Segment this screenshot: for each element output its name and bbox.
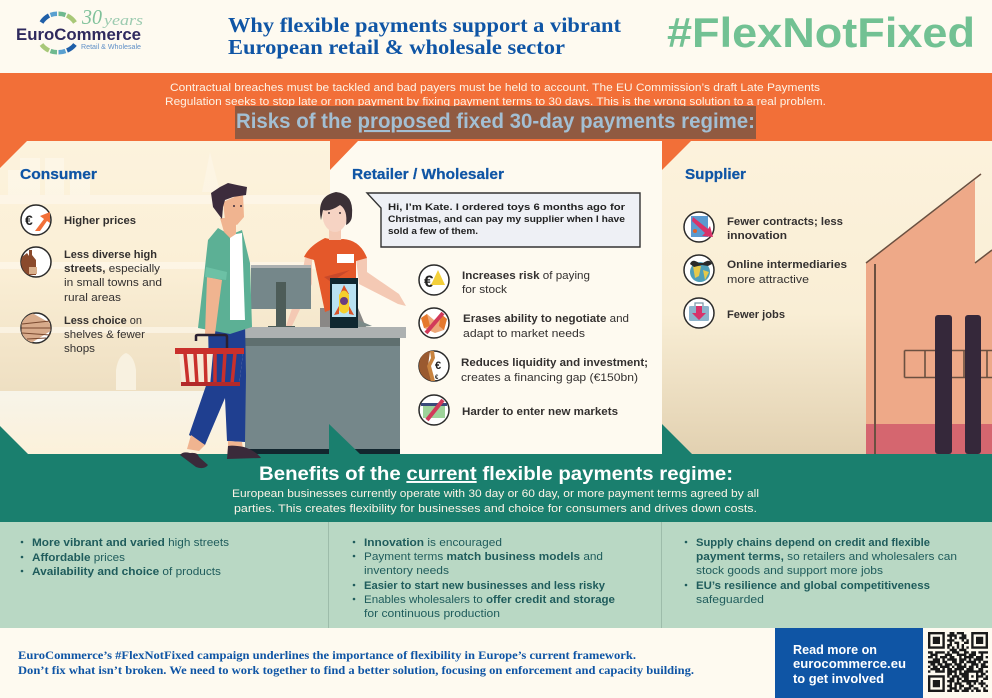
icon: higher prices: €	[25, 212, 33, 228]
speech bubble: Hi, I’m Kate. I ordered toys 6 months ago for	[388, 202, 625, 213]
text: risk: Increases risk of paying	[462, 270, 590, 282]
list: supplier benefits: stock goods and support more jobs	[696, 565, 884, 577]
icon: less diverse high streets	[21, 247, 51, 277]
panel: retailer background	[330, 141, 662, 454]
logo: EuroCommerce 30 years: EuroCommerce	[16, 25, 141, 44]
illustration: factory	[866, 174, 992, 454]
corner triangles	[0, 141, 692, 454]
logo: EuroCommerce 30 years: years	[102, 13, 143, 29]
icon: less choice	[21, 313, 51, 343]
text: liquidity	[461, 357, 648, 384]
illustration: shopper	[175, 183, 261, 468]
text: less choice	[64, 315, 145, 355]
icon: risk: €	[424, 272, 434, 291]
text: new markets: Harder to enter new markets	[462, 406, 618, 418]
text: less choice: shelves & fewer	[64, 329, 145, 341]
text: online intermediaries: more attractive	[727, 274, 809, 286]
list: consumer benefits	[21, 537, 230, 578]
heading: retailer / wholesaler: Retailer / Wholesaler	[352, 166, 504, 183]
panel: benefits lists background	[0, 522, 992, 628]
text: fewer contracts: innovation	[727, 230, 787, 242]
panel: consumer background	[0, 141, 330, 454]
orange intro band: Regulation seeks to stop late or non payment by fixing payment terms to 30 days. This is the wrong solution to a real problem.	[165, 96, 826, 108]
call to action box: eurocommerce.eu	[793, 657, 906, 671]
logo: EuroCommerce 30 years: 30	[81, 5, 102, 29]
text: negotiate	[463, 313, 629, 340]
footer background	[0, 628, 992, 698]
text: fewer jobs: Fewer jobs	[727, 309, 785, 321]
icon: negotiate	[419, 308, 449, 338]
list: retailer benefits	[353, 537, 615, 620]
illustration: counter	[245, 327, 406, 454]
text: less diverse high streets	[64, 249, 162, 304]
list: supplier benefits: safeguarded	[696, 594, 764, 606]
list: retailer benefits: Easier to start new businesses and less risky	[364, 580, 606, 592]
heading: consumer: Consumer	[20, 166, 97, 183]
orange intro band: Contractual breaches must be tackled and bad payers must be held to account. The EU Commission’s draft Late Payments	[170, 82, 821, 94]
text: online intermediaries	[727, 259, 847, 286]
heading: supplier: Supplier	[685, 166, 746, 183]
heading: risks	[235, 106, 756, 139]
QR code	[928, 633, 988, 691]
list: retailer benefits: inventory needs	[364, 565, 450, 577]
text: higher prices: Higher prices	[64, 215, 136, 227]
call to action box: to get involved	[793, 672, 884, 686]
list: supplier benefits: Supply chains depend on credit and flexible	[696, 537, 930, 549]
text: liquidity: creates a financing gap (€150bn)	[461, 372, 638, 384]
speech bubble: sold a few of them.	[388, 226, 478, 237]
title: Why flexible payments support a vibrant	[228, 13, 621, 37]
icon: online intermediaries	[684, 255, 714, 285]
text: risk: for stock	[462, 284, 508, 296]
text: fewer contracts: Fewer contracts; less	[727, 216, 843, 228]
orange intro band	[0, 73, 992, 141]
text: less diverse high streets: in small towns and	[64, 277, 162, 289]
list: retailer benefits: Payment terms match business models and	[364, 551, 603, 563]
green benefits band: European businesses currently operate with 30 day or 60 day, or more payment terms agreed by all	[232, 488, 759, 500]
title	[228, 13, 621, 59]
speech bubble	[367, 193, 640, 247]
list: consumer benefits: More vibrant and varied high streets	[32, 537, 230, 549]
hashtag: #FlexNotFixed	[667, 9, 975, 56]
icon: liquidity	[419, 351, 449, 381]
list: retailer benefits: for continuous production	[364, 608, 500, 620]
list: retailer benefits: Innovation is encouraged	[364, 537, 502, 549]
list: consumer benefits: Affordable prices	[32, 552, 126, 564]
icon: liquidity: €	[435, 360, 441, 372]
list: retailer benefits: Enables wholesalers to offer credit and storage	[364, 594, 615, 606]
green benefits band: parties. This creates flexibility for businesses and choice for consumers and drives down costs.	[234, 503, 757, 515]
title: European retail & wholesale sector	[228, 35, 565, 59]
illustration: monitor	[251, 265, 311, 328]
icon: fewer contracts	[684, 212, 714, 242]
text: less choice: Less choice on	[64, 315, 142, 327]
icon: liquidity: €	[435, 375, 439, 381]
call to action box: Read more on	[793, 643, 877, 657]
text: risk	[462, 270, 590, 296]
header background	[0, 0, 992, 73]
text: fewer contracts	[727, 216, 843, 242]
text: less diverse high streets: Less diverse high	[64, 249, 157, 261]
icon: risk	[419, 265, 449, 295]
footer statement	[18, 650, 694, 677]
text: negotiate: adapt to market needs	[463, 328, 586, 340]
text: negotiate: Erases ability to negotiate and	[463, 313, 629, 325]
call to action box	[775, 628, 923, 698]
list: consumer benefits: Availability and choice of products	[32, 566, 222, 578]
panel: supplier background	[662, 141, 992, 454]
footer statement: Don’t fix what isn’t broken. We need to work together to find a better solution, focusing on enforcement and capacity building.	[18, 665, 694, 677]
illustration: cashier	[286, 192, 406, 327]
text: liquidity: Reduces liquidity and investment;	[461, 357, 648, 369]
green benefits band	[0, 454, 992, 522]
text: less diverse high streets: rural areas	[64, 292, 122, 304]
heading: risks: Risks of the proposed fixed 30-day payments regime:	[236, 110, 755, 133]
speech bubble: Christmas, and can pay my supplier when I have	[388, 214, 625, 225]
text: online intermediaries: Online intermediaries	[727, 259, 847, 271]
logo: EuroCommerce 30 years: Retail & Wholesale	[81, 44, 141, 51]
logo: EuroCommerce 30 years	[16, 5, 143, 52]
illustration: card reader display	[330, 278, 358, 328]
icon: new markets	[419, 395, 449, 425]
footer statement: EuroCommerce’s #FlexNotFixed campaign underlines the importance of flexibility in Europe’s current framework.	[18, 650, 636, 662]
text: less diverse high streets: streets, especially	[64, 263, 161, 275]
list: supplier benefits: EU’s resilience and global competitiveness	[696, 580, 930, 592]
icon: fewer jobs	[684, 298, 714, 328]
list: supplier benefits: payment terms, so retailers and wholesalers can	[696, 551, 957, 563]
icon: higher prices	[21, 205, 51, 235]
list: supplier benefits	[685, 537, 957, 606]
text: less choice: shops	[64, 343, 96, 355]
green benefits band: Benefits of the current flexible payments regime:	[259, 463, 733, 485]
